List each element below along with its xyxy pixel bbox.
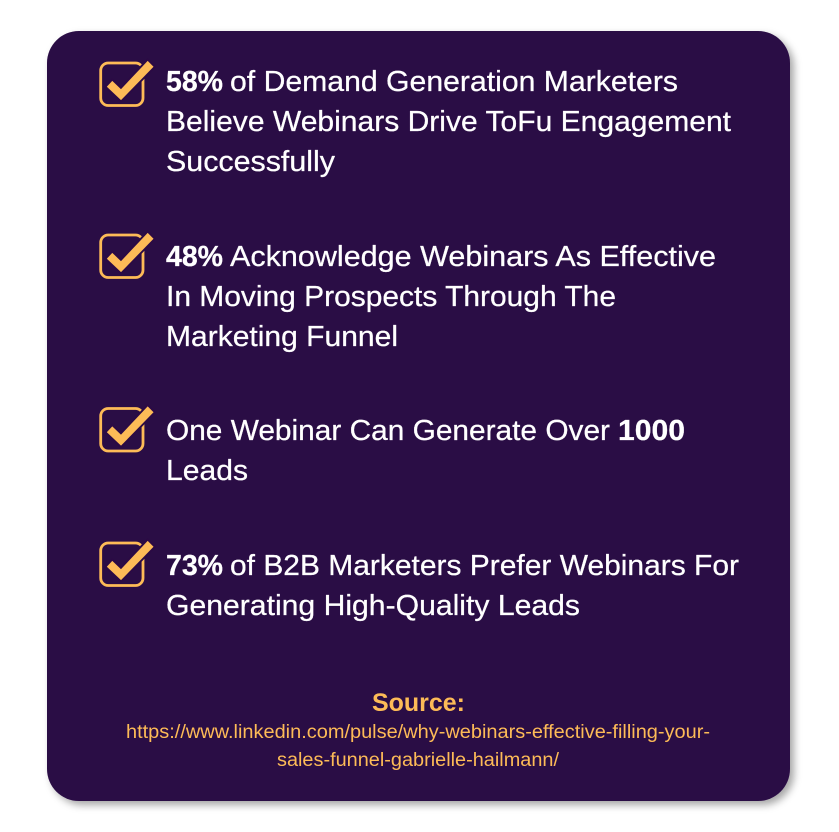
statistic 3 text: One Webinar Can Generate Over [166, 415, 610, 447]
statistic 4 text: 73% [166, 550, 223, 582]
icon: checkbox 2 [101, 234, 153, 278]
statistic 3 text: Leads [166, 455, 248, 487]
statistic 2 text: Acknowledge Webinars As Effective [230, 241, 716, 273]
statistic 1 text: of Demand Generation Marketers [230, 66, 678, 98]
statistic 4: 73% [101, 542, 739, 622]
icon: checkbox 4 [101, 542, 153, 586]
source url [126, 722, 710, 771]
source url: sales-funnel-gabrielle-hailmann/ [277, 750, 560, 771]
statistic 2 text: In Moving Prospects Through The [166, 281, 616, 313]
statistic 1 text: 58% [166, 66, 223, 98]
statistic 1 text [166, 66, 731, 178]
statistic 1 text: Believe Webinars Drive ToFu Engagement [166, 106, 731, 138]
statistic 2 text [166, 241, 716, 353]
statistic 4 text: Generating High-Quality Leads [166, 590, 580, 622]
statistic 3 text: 1000 [618, 415, 685, 447]
statistic 4 text [166, 550, 739, 622]
statistic 1: 58% [101, 62, 731, 178]
statistic 2 text: 48% [166, 241, 223, 273]
statistic 1 text: Successfully [166, 146, 336, 178]
statistic 3 text [166, 415, 685, 487]
icon: checkbox 3 [101, 407, 153, 451]
statistic 4 text: of B2B Marketers Prefer Webinars For [230, 550, 739, 582]
statistic 3: 1000 leads [101, 407, 685, 487]
source url: https://www.linkedin.com/pulse/why-webinars-effective-filling-your- [126, 722, 710, 743]
icon: checkbox 1 [101, 62, 153, 106]
source heading: Source: [372, 689, 465, 717]
statistic 2: 48% [101, 234, 716, 353]
statistic 2 text: Marketing Funnel [166, 321, 398, 353]
